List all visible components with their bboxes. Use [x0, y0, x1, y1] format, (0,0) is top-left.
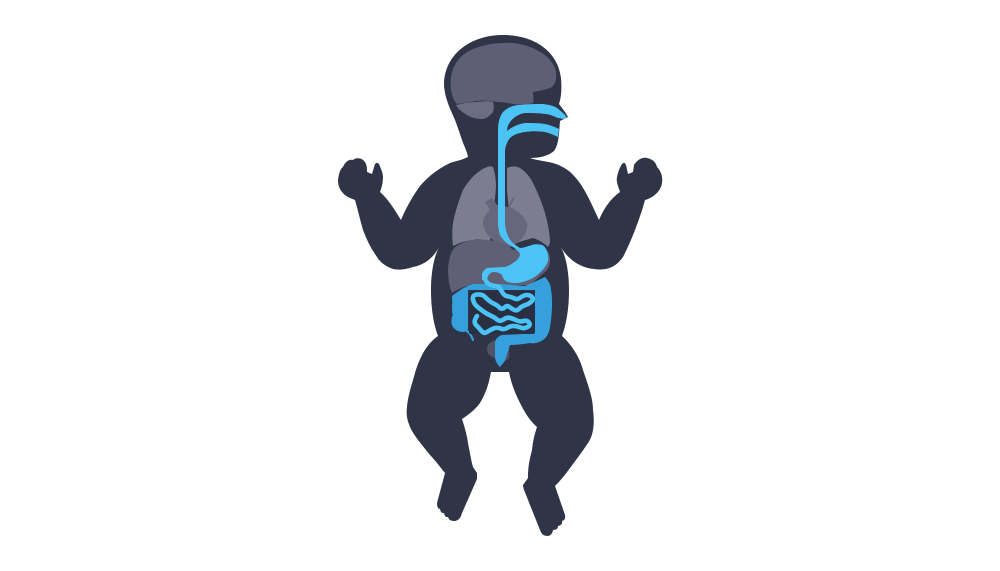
- liver: [448, 240, 550, 293]
- colon haustra: right edge: [548, 285, 549, 326]
- cerebellum: [456, 101, 494, 119]
- appendix: [464, 329, 473, 340]
- brain: [451, 43, 556, 105]
- small intestine backdrop: [469, 291, 535, 334]
- airway and food pipe in the head: [498, 104, 566, 152]
- bladder: [487, 340, 510, 361]
- colon: large intestine: [451, 277, 552, 367]
- lung: right: [507, 166, 550, 247]
- lung: left: [452, 166, 496, 246]
- baby body silhouette: [338, 35, 662, 536]
- heart: [483, 197, 527, 247]
- stomach and esophagus: [482, 150, 548, 283]
- duodenum: [484, 277, 499, 288]
- colon haustra: left edge: [452, 298, 456, 326]
- small intestine: [473, 287, 533, 333]
